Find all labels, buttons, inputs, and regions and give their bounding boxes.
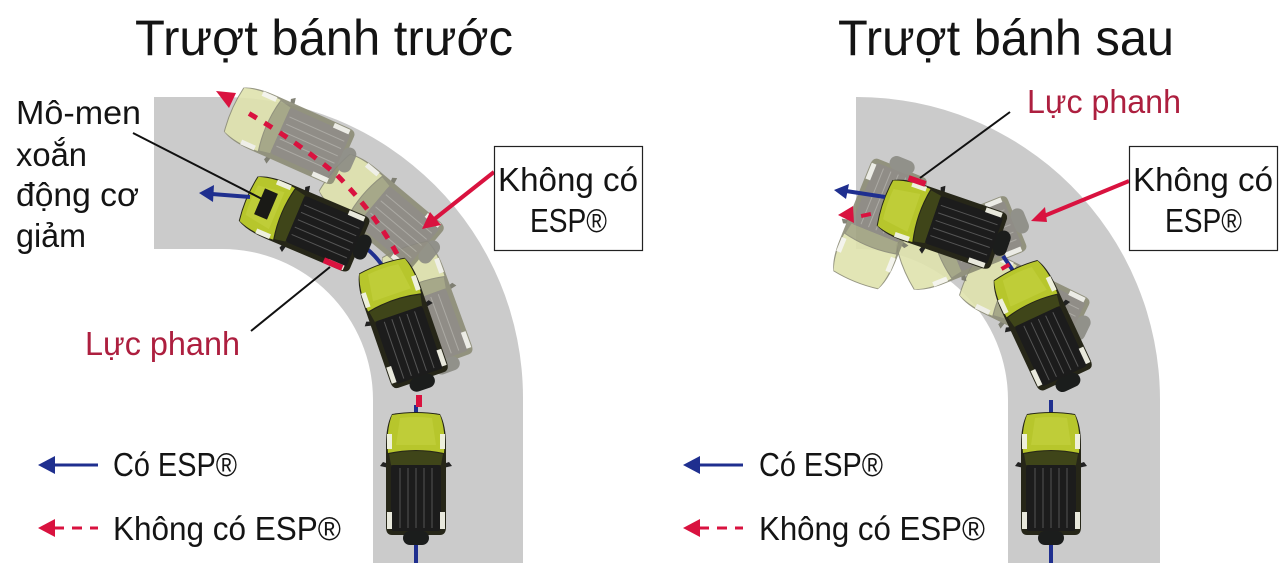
icon: brake force marker	[323, 257, 343, 271]
car path: without ESP, ghost cars	[217, 76, 483, 384]
icon: brake force marker	[908, 175, 926, 187]
road: right curve	[856, 97, 1160, 563]
panel: rear-wheel skid	[683, 10, 1278, 563]
road: left curve	[154, 97, 523, 563]
car: turning	[347, 252, 459, 401]
label: engine torque reduced: động cơ	[16, 176, 139, 213]
leader line: engine torque	[133, 133, 262, 199]
legend: without ESP: Không có ESP®	[759, 510, 985, 547]
title: Trượt bánh sau	[838, 10, 1174, 66]
title: Trượt bánh trước	[135, 10, 513, 66]
label: engine torque reduced: giảm	[16, 217, 86, 254]
legend: with ESP	[683, 446, 883, 483]
label: brake force: Lực phanh	[85, 325, 240, 362]
callout: without ESP: ESP®	[530, 202, 607, 239]
arrow: red no-ESP marks	[838, 206, 1010, 271]
car: straight	[380, 412, 452, 545]
arrow: blue ESP direction	[834, 184, 885, 199]
car: turning	[982, 253, 1104, 404]
car: with ESP, braking	[232, 165, 383, 283]
arrow: blue ESP path segments	[366, 248, 416, 563]
label: brake force: Lực phanh	[1027, 83, 1181, 120]
legend: with ESP: Có ESP®	[113, 446, 237, 483]
label: engine torque reduced: xoắn	[16, 136, 87, 173]
callout: without ESP	[1130, 146, 1278, 250]
panel: front-wheel skid	[16, 10, 642, 563]
label: engine torque reduced: Mô-men	[16, 94, 141, 131]
arrow: callout to no-ESP car	[1031, 181, 1129, 222]
callout: without ESP	[494, 146, 642, 250]
arrow: red dashed no-ESP path	[216, 91, 422, 407]
icon: engine torque marker	[254, 188, 278, 220]
legend: with ESP: Có ESP®	[759, 446, 883, 483]
arrow: blue ESP direction	[199, 185, 250, 202]
car: straight	[1015, 412, 1087, 545]
callout: without ESP: ESP®	[1165, 202, 1242, 239]
arrow: blue ESP path segments	[1003, 256, 1051, 563]
leader line: brake force	[920, 112, 1010, 178]
car: with ESP, braking	[871, 168, 1020, 280]
car path: without ESP, ghost cars	[822, 145, 1103, 363]
label: engine torque reduced	[16, 94, 141, 254]
legend: with ESP	[38, 446, 237, 483]
leader line: brake force	[251, 267, 330, 331]
callout: without ESP: Không có	[1133, 161, 1273, 198]
legend: without ESP: Không có ESP®	[113, 510, 341, 547]
arrow: callout to no-ESP car	[422, 172, 494, 229]
callout: without ESP: Không có	[498, 161, 638, 198]
